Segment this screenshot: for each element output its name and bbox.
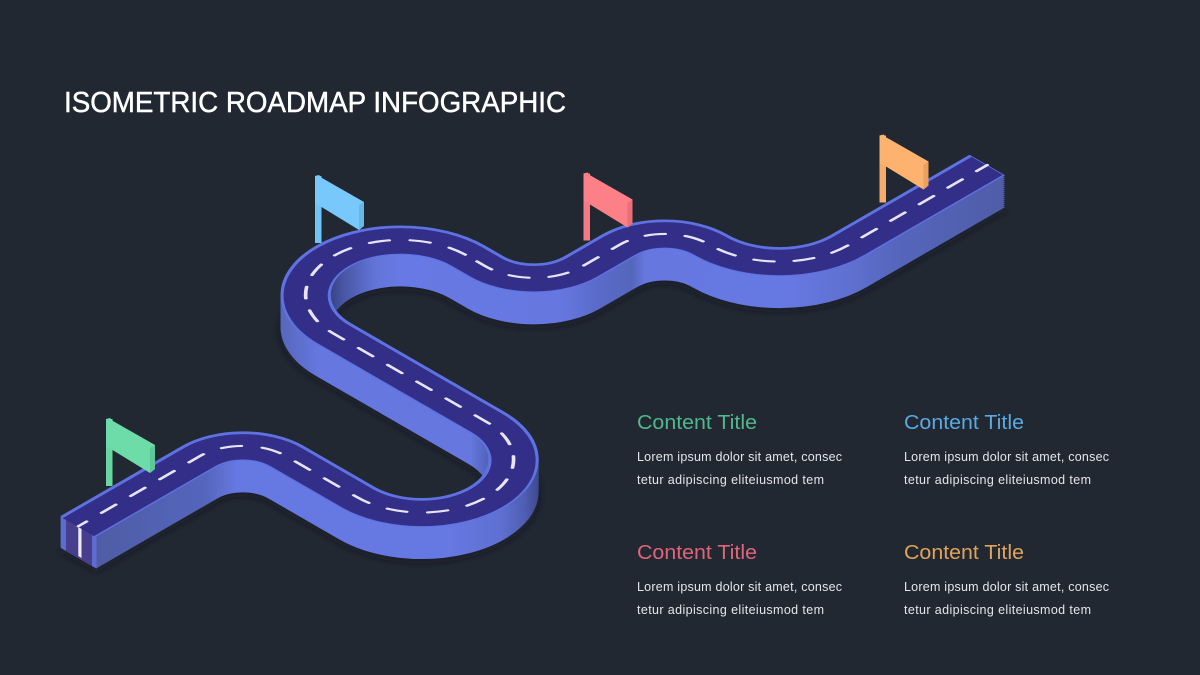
flag: blue [315,175,364,243]
content block: green: tetur adipiscing eliteiusmod tem [637,473,824,487]
content block: orange: tetur adipiscing eliteiusmod tem [904,603,1091,617]
content block: green: Content Title [637,412,757,434]
content block: blue: tetur adipiscing eliteiusmod tem [904,473,1091,487]
road start front face [61,516,97,568]
content block: blue: Content Title [904,412,1024,434]
flag: orange [880,134,928,202]
content block: red [637,542,842,617]
title: ISOMETRIC ROADMAP INFOGRAPHIC [64,87,566,119]
flag: red [584,172,632,240]
content block: blue [904,412,1109,487]
road surface [0,23,1024,630]
content block: orange: Content Title [904,542,1024,564]
content block: blue: Lorem ipsum dolor sit amet, consec [904,450,1109,464]
content block: green: Lorem ipsum dolor sit amet, consec [637,450,842,464]
road edge [0,22,1024,630]
road side wall: lower section [78,369,533,661]
road side wall: upper section [286,24,987,459]
content block: red: tetur adipiscing eliteiusmod tem [637,603,824,617]
road shadow [0,58,1024,666]
content block: green [637,412,842,487]
lane dashes: second half [468,60,987,360]
road side wall: diagonal section [267,297,552,492]
flag: green [106,418,155,486]
content block: orange [904,542,1109,617]
lane dashes: first half [0,217,686,630]
content block: red: Content Title [637,542,757,564]
content block: orange: Lorem ipsum dolor sit amet, consec [904,580,1109,594]
content block: red: Lorem ipsum dolor sit amet, consec [637,580,842,594]
